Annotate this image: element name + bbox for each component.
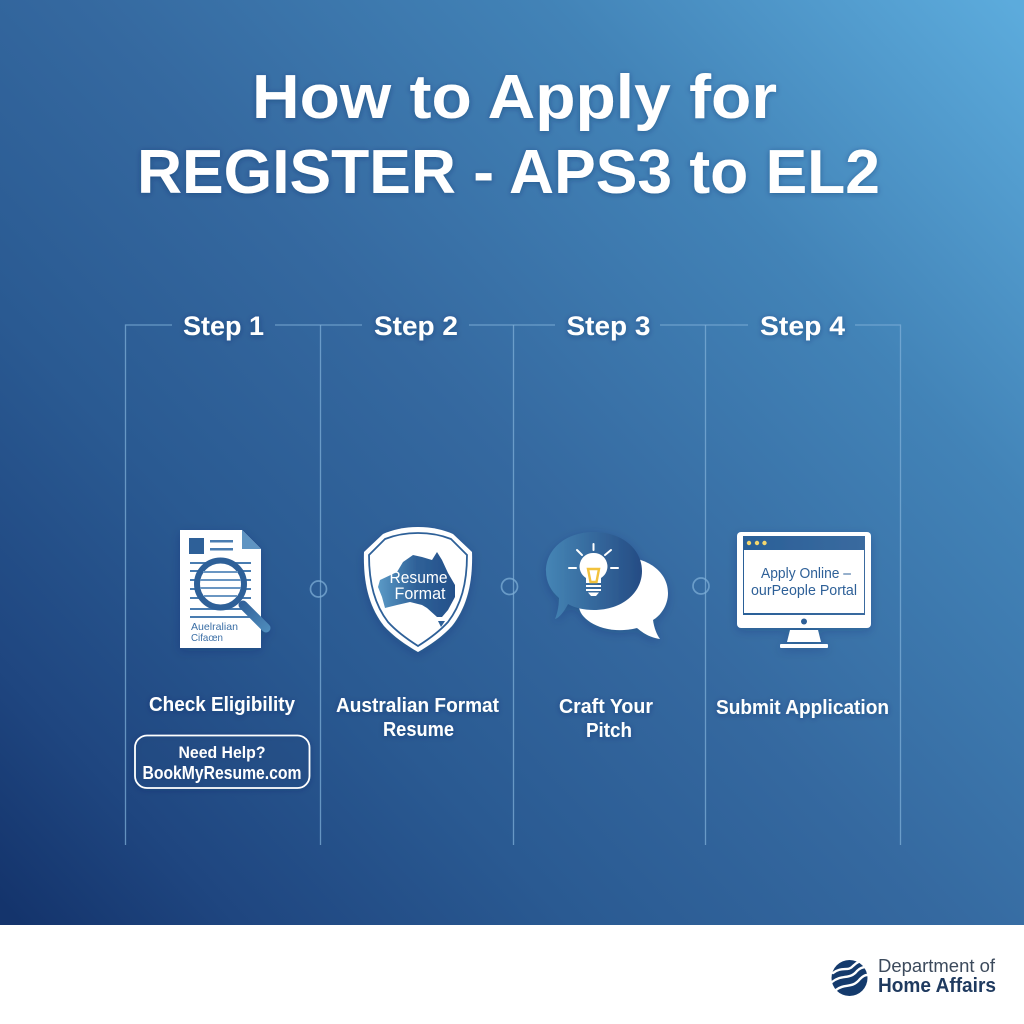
- label: australian format resume: Resume: [383, 719, 454, 741]
- step headings: Step 3: [566, 311, 650, 341]
- label: check eligibility: Check Eligibility: [149, 694, 296, 716]
- icon: document with magnifier: Auelralian: [191, 621, 238, 633]
- icon: monitor with portal: Apply Online –: [761, 565, 852, 582]
- callout: need help: Need Help?: [178, 743, 266, 762]
- logo: Department of Home Affairs: Home Affairs: [878, 975, 996, 997]
- step headings: Step 1: [183, 311, 264, 341]
- title: How to Apply for: [252, 63, 777, 132]
- footer band: [0, 925, 1024, 1024]
- icon: document with magnifier: [180, 530, 266, 648]
- label: craft your pitch: Craft Your: [559, 696, 653, 718]
- step headings: [183, 311, 845, 341]
- icon: document with magnifier: Cifaœn: [191, 632, 223, 644]
- icon: shield with Australia map: [364, 527, 472, 652]
- label: craft your pitch: [559, 696, 653, 742]
- title: [137, 63, 880, 207]
- callout: need help: BookMyResume.com: [142, 763, 302, 783]
- label: australian format resume: Australian Format: [336, 695, 499, 717]
- timeline frame: [126, 325, 900, 845]
- title: REGISTER - APS3 to EL2: [137, 138, 880, 207]
- icon: shield with Australia map: Format: [394, 584, 446, 603]
- icon: chat bubbles with light bulb: [546, 532, 668, 639]
- label: submit application: Submit Application: [716, 697, 889, 719]
- callout: need help: [135, 736, 310, 788]
- icon: monitor with portal: [737, 532, 871, 648]
- logo: Department of Home Affairs: Department of: [878, 956, 996, 976]
- label: craft your pitch: Pitch: [586, 720, 632, 742]
- icon: monitor with portal: ourPeople Portal: [751, 582, 857, 599]
- step headings: Step 4: [760, 311, 845, 341]
- step headings: Step 2: [374, 311, 458, 341]
- label: australian format resume: [336, 695, 499, 741]
- logo: Department of Home Affairs: [832, 956, 996, 997]
- icon: shield with Australia map: Resume: [390, 568, 448, 587]
